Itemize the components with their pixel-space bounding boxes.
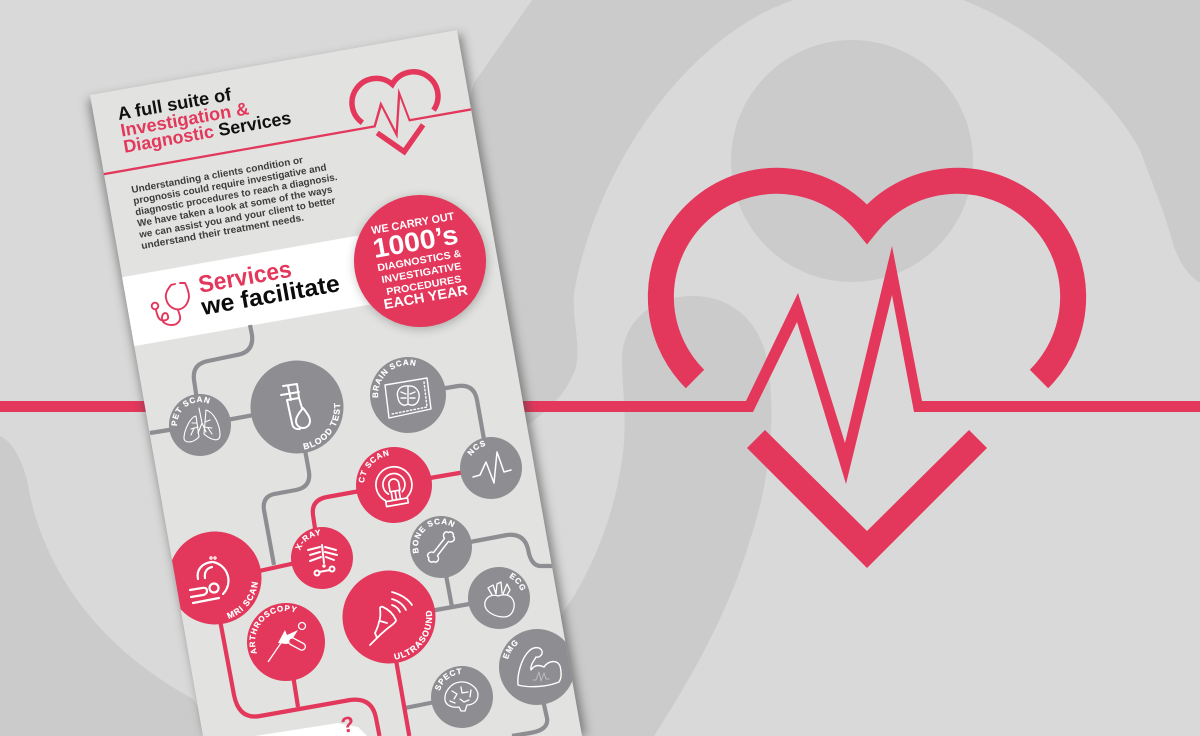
title: Diagnostic Services: [122, 108, 293, 157]
panel: infographic sheet: [90, 30, 582, 736]
paper shadow: [88, 34, 586, 736]
node: CT scan: CT SCAN: [358, 450, 389, 482]
node: brain scan: [370, 357, 446, 433]
service nodes: [169, 357, 572, 728]
large heart with ECG line: [0, 181, 1200, 568]
node: EMG: [499, 629, 572, 705]
node: EMG: EMG: [502, 640, 518, 660]
node: MRI scan: [172, 532, 262, 624]
icon: stethoscope: [152, 283, 189, 325]
heart bottom chevron: [747, 430, 987, 568]
intro paragraph: We have taken a look at some of the ways: [137, 184, 334, 230]
node: SPECT: SPECT: [435, 668, 462, 690]
callout: 1000's badge: WE CARRY OUT: [370, 211, 456, 237]
node: ultrasound: ULTRASOUND: [394, 610, 432, 660]
node: ultrasound: [342, 570, 436, 664]
title: [116, 75, 293, 157]
node: NCS: [460, 437, 522, 499]
node: ECG: [468, 567, 530, 629]
title: Investigation &: [119, 98, 250, 141]
services banner: [122, 230, 400, 346]
banner heading: Services: [196, 256, 294, 299]
intro paragraph: understand their treatment needs.: [140, 213, 305, 252]
heart outline: [661, 181, 1073, 379]
node: SPECT: [431, 666, 493, 728]
node: X-ray: X-RAY: [295, 529, 320, 551]
node: NCS: NCS: [467, 440, 486, 456]
next section banner with question mark: [255, 711, 367, 736]
node: ECG: ECG: [509, 572, 526, 590]
callout: 1000's badge: EACH YEAR: [382, 282, 469, 312]
connector lines: [150, 325, 552, 736]
intro paragraph: diagnostic procedures to reach a diagnosis.: [135, 172, 339, 218]
intro paragraph: we can assist you and your client to better: [137, 195, 337, 241]
node: blood test: BLOOD TEST: [303, 403, 340, 450]
intro paragraph: Understanding a clients condition or: [131, 155, 304, 196]
node: PET scan: [169, 394, 231, 456]
node: bone scan: BONE SCAN: [412, 518, 455, 554]
node: PET scan: PET SCAN: [171, 396, 210, 426]
node: brain scan: BRAIN SCAN: [372, 359, 416, 398]
callout: 1000's badge: [354, 195, 487, 329]
node: X-ray: [291, 527, 353, 589]
node: arthroscopy: [247, 603, 325, 681]
node: CT scan: [356, 447, 432, 523]
node: blood test: [250, 360, 344, 454]
node: arthroscopy: ARTHROSCOPY: [249, 605, 298, 654]
callout: 1000's badge: DIAGNOSTICS &: [377, 249, 462, 274]
callout: 1000's badge: INVESTIGATIVE: [381, 261, 463, 286]
node: MRI scan: MRI SCAN: [226, 582, 258, 619]
small heart logo with line: [96, 63, 477, 208]
sheet upper section: [92, 44, 501, 346]
callout: 1000's badge: 1000’s: [370, 219, 460, 264]
intro paragraph: [130, 149, 345, 252]
title: A full suite of: [116, 84, 234, 124]
node: bone scan: [410, 516, 472, 578]
intro paragraph: prognosis could require investigative and: [133, 162, 327, 207]
banner heading: we facilitate: [198, 270, 342, 321]
banner heading: [194, 248, 342, 321]
ECG pulse line: [0, 246, 1200, 484]
callout: 1000's badge: PROCEDURES: [386, 274, 463, 298]
